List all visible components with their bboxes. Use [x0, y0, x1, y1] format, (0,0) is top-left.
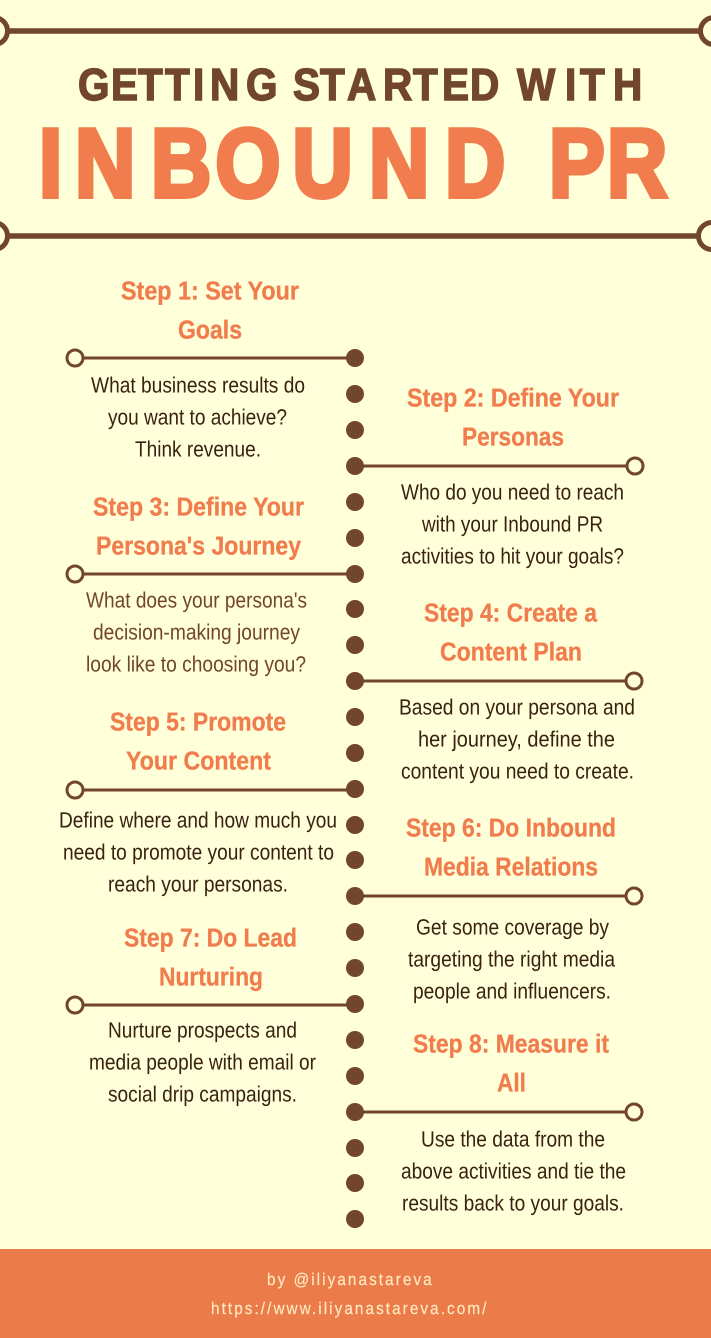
heading: getting started with: GETTING STARTED WITH	[78, 59, 642, 110]
step 3 connector	[67, 566, 355, 582]
step 2 body	[401, 480, 624, 569]
step 3 body	[86, 588, 307, 677]
step 4 heading: Content Plan	[440, 636, 582, 666]
step 3 body: decision-making journey	[93, 620, 300, 645]
step 7 connector	[67, 997, 355, 1013]
step 3 heading: Persona's Journey	[96, 530, 301, 560]
step 2 heading: Personas	[462, 421, 564, 451]
step 6	[355, 812, 642, 1004]
step 1 connector	[67, 350, 355, 366]
heading: inbound pr: INBOUND PR	[39, 108, 667, 218]
step 5 body: reach your personas.	[108, 872, 288, 897]
step 5 body: need to promote your content to	[63, 840, 334, 865]
step 7 heading	[124, 922, 297, 991]
step 7 heading: Nurturing	[159, 961, 263, 991]
step 1 heading: Step 1: Set Your	[121, 275, 299, 305]
step 5 heading: Step 5: Promote	[110, 706, 286, 736]
footer credits	[211, 1270, 487, 1318]
step 6 heading: Media Relations	[424, 851, 598, 881]
step 8 heading: Step 8: Measure it	[413, 1028, 609, 1058]
step 1 body: What business results do	[91, 373, 305, 398]
step 8 heading	[413, 1028, 609, 1097]
step 8 connector	[355, 1104, 642, 1120]
step 6 heading	[406, 812, 616, 881]
step 4 body: her journey, define the	[418, 727, 615, 752]
step 5 heading	[110, 706, 286, 775]
step 3	[67, 491, 355, 677]
step 4 body	[399, 695, 635, 784]
step 2 body: Who do you need to reach	[401, 480, 624, 505]
step 7 body: Nurture prospects and	[108, 1018, 297, 1043]
step 1 heading	[121, 275, 299, 344]
step 1 body	[91, 373, 305, 462]
step 6 body: people and influencers.	[413, 979, 611, 1004]
step 2 body: activities to hit your goals?	[401, 544, 624, 569]
footer band	[0, 1249, 711, 1338]
step 1 body: Think revenue.	[135, 437, 261, 462]
step 8 body	[401, 1127, 626, 1216]
footer credits: https://www.iliyanastareva.com/	[211, 1299, 487, 1318]
step 5 connector	[67, 782, 355, 798]
title banner	[0, 18, 711, 250]
step 5	[59, 706, 355, 897]
step 4 heading: Step 4: Create a	[424, 597, 597, 627]
step 7 body	[89, 1018, 316, 1107]
step 2 body: with your Inbound PR	[421, 512, 603, 537]
step 2	[355, 382, 643, 569]
step 7 heading: Step 7: Do Lead	[124, 922, 297, 952]
step 2 connector	[355, 458, 643, 474]
step 3 heading	[93, 491, 304, 560]
step 7 body: social drip campaigns.	[108, 1082, 297, 1107]
step 2 heading: Step 2: Define Your	[407, 382, 619, 412]
step 2 heading	[407, 382, 619, 451]
step 6 body	[408, 915, 616, 1004]
step 6 body: Get some coverage by	[416, 915, 609, 940]
step 6 connector	[355, 888, 642, 904]
step 7	[67, 922, 355, 1107]
step 4	[355, 597, 642, 784]
step 8	[355, 1028, 642, 1216]
step 4 body: content you need to create.	[401, 759, 634, 784]
footer	[0, 1249, 711, 1338]
footer credits: by @iliyanastareva	[267, 1270, 432, 1289]
step 8 body: results back to your goals.	[402, 1191, 624, 1216]
step 4 heading	[424, 597, 597, 666]
timeline dots	[346, 349, 364, 1228]
bottom rule	[0, 222, 711, 250]
step 4 connector	[355, 673, 642, 689]
step 5 heading: Your Content	[126, 745, 271, 775]
step 8 body: above activities and tie the	[401, 1159, 626, 1184]
step 4 body: Based on your persona and	[399, 695, 635, 720]
top rule	[0, 18, 711, 44]
step 5 body	[59, 808, 337, 897]
step 1	[67, 275, 355, 462]
step 1 body: you want to achieve?	[108, 405, 287, 430]
step 1 heading: Goals	[178, 314, 242, 344]
step 3 heading: Step 3: Define Your	[93, 491, 304, 521]
step 8 heading: All	[497, 1067, 526, 1097]
step 6 body: targeting the right media	[408, 947, 616, 972]
step 5 body: Define where and how much you	[59, 808, 337, 833]
step 8 body: Use the data from the	[421, 1127, 605, 1152]
step 3 body: look like to choosing you?	[86, 652, 306, 677]
step 6 heading: Step 6: Do Inbound	[406, 812, 616, 842]
step 7 body: media people with email or	[89, 1050, 316, 1075]
step 3 body: What does your persona's	[86, 588, 307, 613]
